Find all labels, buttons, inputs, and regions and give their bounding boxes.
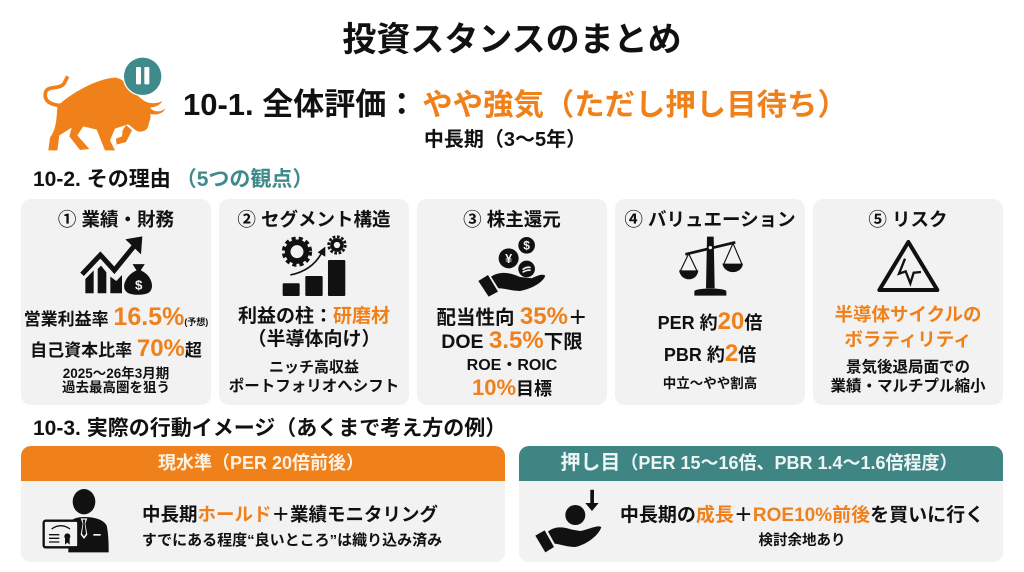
metric: ROE ROIC: ROE・ROIC bbox=[467, 357, 557, 374]
supporting note: 検討余地あり bbox=[758, 533, 846, 549]
icon: hand with coins: ¥ bbox=[505, 252, 512, 266]
note: multiple contraction: 業績・マルチプル縮小 bbox=[830, 378, 986, 395]
icon: growth chart with money bag bbox=[80, 236, 152, 295]
panel header: pullback level bbox=[519, 446, 1003, 481]
icon: gears and rising bars bbox=[282, 235, 347, 296]
heading: 10-1 overall rating: 10-1. 全体評価：やや強気（ただし押し目待ち） bbox=[183, 87, 848, 122]
metric: payout ratio: 配当性向 35%＋ bbox=[436, 303, 587, 330]
supporting note: すでにある程度“良いところ”は織り込み済み bbox=[142, 532, 442, 549]
metric: PBR: PBR 約2倍 bbox=[664, 340, 756, 367]
action text: 中長期の成長＋ROE10%前後を買いに行く bbox=[620, 505, 984, 526]
panel: pullback level bbox=[519, 446, 1003, 562]
metric: DOE floor: DOE 3.5%下限 bbox=[441, 327, 583, 354]
title: 投資スタンスのまとめ bbox=[342, 21, 682, 59]
icon: warning triangle with bolt bbox=[877, 240, 940, 292]
panel header: current level: 現水準（PER 20倍前後） bbox=[158, 453, 364, 473]
panel header: pullback level: 押し目（PER 15～16倍、PBR 1.4～1.6倍程度） bbox=[560, 452, 958, 474]
icon: hand with ball and down arrow bbox=[535, 490, 602, 552]
icon: hand with coins: $ bbox=[523, 239, 530, 253]
icon: hand with coins bbox=[478, 237, 546, 297]
text: time horizon: 中長期（3～5年） bbox=[424, 129, 586, 151]
card heading: ② セグメント構造 bbox=[237, 209, 391, 230]
panel: performance and finance bbox=[21, 199, 211, 405]
text: profit pillar: 利益の柱：研磨材 bbox=[238, 306, 390, 327]
panel: shareholder returns bbox=[417, 199, 607, 405]
metric: operating margin: 営業利益率 16.5%(予想) bbox=[24, 303, 208, 331]
heading: 10-3 action image: 10-3. 実際の行動イメージ（あくまで考え方の例） bbox=[33, 417, 506, 440]
panel header: current level bbox=[21, 446, 505, 481]
card heading: ① 業績・財務 bbox=[58, 209, 174, 230]
note: fiscal 2025-26: 2025～26年3月期 bbox=[63, 366, 169, 381]
panel: segment structure bbox=[219, 199, 409, 405]
icon: bull with pause badge bbox=[43, 58, 166, 150]
card heading: ⑤ リスク bbox=[868, 209, 948, 230]
icon: balance scale bbox=[679, 236, 743, 296]
metric: equity ratio: 自己資本比率 70%超 bbox=[30, 335, 202, 362]
note: neutral to slightly expensive: 中立～やや割高 bbox=[663, 376, 757, 391]
text: for semiconductors: （半導体向け） bbox=[247, 329, 380, 350]
panel: valuation bbox=[615, 199, 805, 405]
note: portfolio shift: ポートフォリオへシフト bbox=[229, 378, 399, 395]
note: niche high margin: ニッチ高収益 bbox=[269, 359, 359, 376]
metric: 10 percent target: 10%目標 bbox=[472, 375, 552, 400]
card heading: ④ バリュエーション bbox=[624, 209, 796, 230]
risk headline line 1: 半導体サイクルの bbox=[834, 304, 982, 325]
note: record high: 過去最高圏を狙う bbox=[62, 380, 170, 395]
icon: businessman with certificate bbox=[42, 489, 109, 552]
action text: 中長期ホールド＋業績モニタリング bbox=[142, 504, 438, 525]
metric: PER: PER 約20倍 bbox=[658, 308, 762, 335]
icon: growth chart with money bag: $ bbox=[135, 277, 143, 292]
card heading: ③ 株主還元 bbox=[463, 209, 561, 230]
panel: risk bbox=[813, 199, 1003, 405]
panel: current level bbox=[21, 446, 505, 562]
risk headline line 2: ボラティリティ bbox=[844, 329, 972, 350]
note: downturn: 景気後退局面での bbox=[846, 359, 970, 376]
heading: 10-2 reasons: 10-2. その理由（5つの観点） bbox=[33, 168, 313, 191]
